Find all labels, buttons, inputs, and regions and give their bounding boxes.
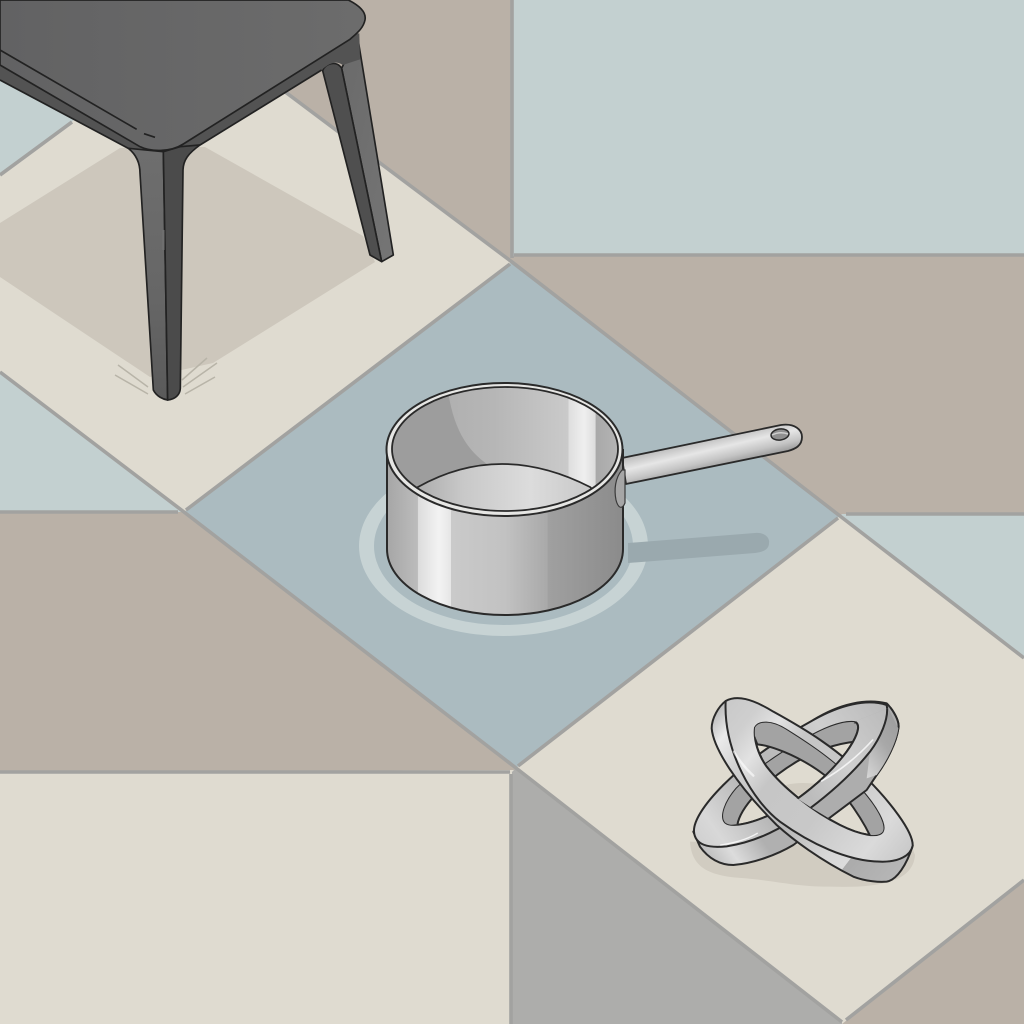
pan interior	[392, 388, 618, 510]
ring B	[693, 701, 899, 865]
pan handle rivet	[615, 470, 625, 507]
chair lower edge	[0, 70, 322, 148]
chair apron	[0, 33, 360, 157]
pan body	[387, 450, 623, 615]
chair shadow	[0, 147, 375, 377]
pan interior outline	[392, 387, 618, 511]
burner ring	[359, 456, 648, 636]
chair seat	[0, 0, 365, 150]
ring A	[712, 698, 913, 882]
pan rim	[386, 383, 622, 516]
ring B front band	[796, 707, 900, 818]
pan handle	[622, 425, 802, 484]
icon: saucepan	[385, 383, 802, 615]
pan shadow	[628, 533, 769, 563]
seat bevel lines	[0, 50, 155, 137]
icon: interlocked rings	[690, 698, 915, 887]
rings shadow	[690, 783, 915, 887]
chair rear leg	[323, 35, 393, 262]
icon: chair	[0, 0, 393, 400]
scuff marks	[115, 358, 217, 394]
chair front leg	[128, 145, 200, 400]
